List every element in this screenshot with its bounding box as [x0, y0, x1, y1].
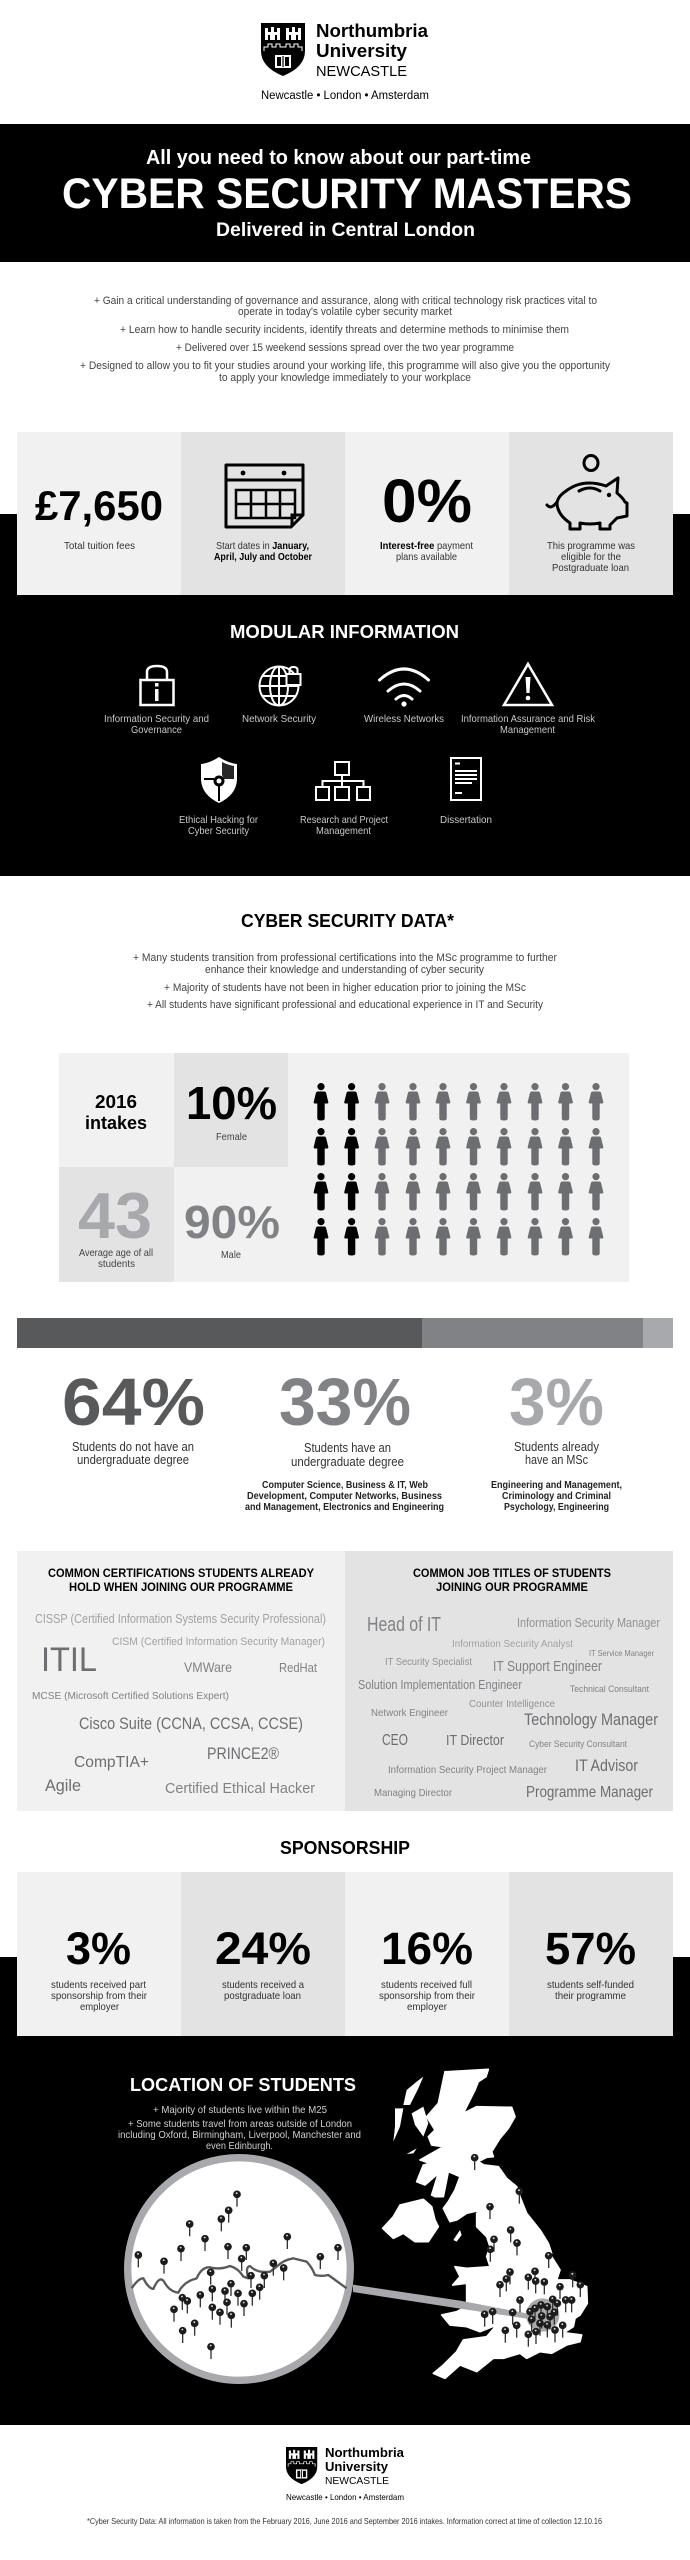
word cloud: CompTIA+ [74, 1754, 149, 1771]
word cloud: Certified Ethical Hacker [165, 1780, 315, 1797]
word cloud: Network Engineer [371, 1707, 448, 1719]
word cloud: Cyber Security Consultant [529, 1739, 627, 1750]
stat: 16 percent: 16% [381, 1923, 473, 1974]
logo wordmark [286, 2445, 405, 2502]
word cloud: IT Support Engineer [493, 1658, 602, 1675]
data bullet points [133, 952, 557, 1011]
word cloud: Technical Consultant [570, 1684, 649, 1695]
intro bullet points: + Designed to allow you to fit your studies around your working life, this programme will also give you the opportunity [80, 360, 610, 372]
stat: 24 percent [215, 1923, 311, 2002]
average age stat: students [98, 1258, 135, 1270]
stat: 3 percent [51, 1923, 147, 2013]
label: information security [104, 713, 209, 736]
loan text: Postgraduate loan [552, 562, 629, 574]
stat: 33 percent: and Management, Electronics and Engineering [245, 1501, 444, 1513]
label: network security: Network Security [242, 713, 317, 725]
intro bullet points: + Gain a critical understanding of governance and assurance, along with critical technology risk practices vital to [94, 295, 597, 307]
stat: 3 percent: 3% [66, 1923, 131, 1974]
heading: HOLD WHEN JOINING OUR PROGRAMME [69, 1580, 293, 1594]
label: research [300, 814, 388, 837]
female stat: 10% [186, 1077, 277, 1129]
loan text [547, 540, 635, 574]
data bullet points: + All students have significant professional and educational experience in IT and Security [147, 999, 543, 1011]
stat: 16 percent [379, 1923, 475, 2013]
heading: cyber security data: CYBER SECURITY DATA* [241, 911, 454, 931]
interest free: plans available [396, 551, 457, 563]
label: dissertation: Dissertation [440, 814, 492, 826]
heading: modular information: MODULAR INFORMATION [230, 621, 459, 642]
interest free: Interest-free payment [380, 540, 473, 552]
footer logo [286, 2445, 405, 2502]
word cloud: CISSP (Certified Information Systems Security Professional) [35, 1612, 326, 1626]
stat: 33 percent: Computer Science, Business & IT, Web [262, 1479, 428, 1491]
stat: 64 percent: undergraduate degree [77, 1452, 189, 1467]
header logo [261, 21, 429, 102]
word cloud: MCSE (Microsoft Certified Solutions Expert) [32, 1690, 229, 1702]
stat: 24 percent: students received a [222, 1979, 304, 1991]
logo wordmark: University [325, 2459, 389, 2474]
intro bullet points: operate in today's volatile cyber security market [238, 306, 452, 318]
intro bullet points: + Learn how to handle security incidents, identify threats and determine methods to minimise them [120, 324, 569, 336]
tuition fee [35, 482, 163, 552]
Great Britain [417, 2069, 587, 2378]
stat: 3 percent: Students already [514, 1439, 599, 1454]
panel: sponsorship [17, 1872, 673, 2036]
stat: 64 percent: 64% [62, 1365, 205, 1440]
word cloud: CISM (Certified Information Security Manager) [112, 1636, 325, 1648]
modules [104, 664, 596, 837]
stat: 57 percent: their programme [555, 1990, 626, 2002]
logo wordmark: Newcastle • London • Amsterdam [286, 2492, 404, 2502]
word cloud: Information Security Manager [517, 1616, 660, 1630]
label: research: Management [316, 825, 371, 837]
icon: warning triangle [504, 664, 552, 705]
location bullet points: even Edinburgh. [206, 2140, 273, 2152]
label: ethical hacking: Cyber Security [188, 825, 250, 837]
heading: COMMON CERTIFICATIONS STUDENTS ALREADY [48, 1566, 314, 1580]
word cloud: Cisco Suite (CCNA, CCSA, CCSE) [79, 1714, 303, 1733]
tuition fee: Total tuition fees [64, 540, 135, 552]
icon: padlock [140, 666, 174, 705]
male stat: 90% [184, 1196, 280, 1248]
location bullet points [118, 2104, 361, 2152]
icon: org chart [316, 762, 370, 800]
word cloud: IT Service Manager [589, 1648, 654, 1658]
word cloud: PRINCE2® [207, 1744, 279, 1763]
stat: 16 percent: sponsorship from their [379, 1990, 475, 2002]
stat: 3 percent: 3% [509, 1365, 604, 1440]
panel: 2016 intakes [59, 1053, 629, 1282]
title: All you need to know about our part-time [146, 147, 531, 169]
stat: 3 percent: have an MSc [525, 1452, 588, 1467]
heading [413, 1566, 611, 1594]
islands [393, 2077, 462, 2242]
icon: wifi [380, 669, 428, 707]
word cloud [358, 1614, 660, 1801]
stat: 3 percent [491, 1365, 622, 1513]
start dates: April, July and October [214, 551, 312, 563]
stat: 16 percent: students received full [381, 1979, 472, 1991]
word cloud: VMWare [184, 1659, 232, 1675]
word cloud: Information Security Project Manager [388, 1764, 547, 1776]
data bullet points: + Majority of students have not been in higher education prior to joining the MSc [164, 982, 526, 994]
stat: 33 percent: Development, Computer Networks, Business [247, 1490, 442, 1502]
logo wordmark: Newcastle • London • Amsterdam [261, 90, 429, 102]
logo wordmark: Northumbria [316, 21, 429, 41]
stat: 3 percent: Psychology, Engineering [504, 1501, 609, 1513]
panel: key facts [17, 432, 673, 595]
word cloud: CEO [382, 1732, 408, 1749]
stat: 3 percent: employer [80, 2001, 119, 2013]
intro bullet points: + Delivered over 15 weekend sessions spread over the two year programme [176, 342, 514, 354]
loan text: eligible for the [561, 551, 621, 563]
word cloud: IT Director [446, 1732, 504, 1749]
river Thames [132, 2258, 347, 2293]
stat: 33 percent: undergraduate degree [291, 1454, 404, 1469]
male stat: Male [221, 1249, 241, 1261]
2016 intakes label: intakes [85, 1113, 147, 1133]
title [62, 147, 632, 241]
stacked bar: education [17, 1318, 673, 1348]
pictogram: female and male students [314, 1083, 603, 1256]
heading: JOINING OUR PROGRAMME [436, 1580, 588, 1594]
map: United Kingdom with student pins [353, 2069, 587, 2378]
stat: 33 percent [245, 1365, 444, 1513]
location bullet points: + Some students travel from areas outside of London [128, 2118, 352, 2130]
word cloud: Agile [45, 1776, 81, 1795]
word cloud: IT Advisor [575, 1756, 638, 1775]
stat: 64 percent: Students do not have an [72, 1439, 194, 1454]
black background: location section [0, 1957, 690, 2425]
word cloud: Head of IT [367, 1614, 441, 1636]
label: ethical hacking [179, 814, 258, 837]
logo wordmark: University [316, 41, 407, 61]
word cloud: Programme Manager [526, 1784, 654, 1801]
start dates [214, 540, 312, 563]
word cloud: ITIL [41, 1641, 97, 1679]
icon: university crest [286, 2447, 317, 2484]
icon: globe with lock [260, 666, 300, 706]
icon: calendar [226, 465, 303, 527]
heading [48, 1566, 314, 1594]
label: research: Research and Project [300, 814, 388, 826]
tuition fee: £7,650 [35, 482, 163, 529]
intro bullet points [80, 295, 610, 384]
magnifier handle [353, 2285, 527, 2319]
magnifier: London map with student pins [128, 2158, 350, 2380]
logo wordmark: NEWCASTLE [325, 2475, 389, 2487]
word cloud: Solution Implementation Engineer [358, 1678, 522, 1692]
word cloud: Information Security Analyst [452, 1638, 573, 1650]
word cloud: IT Security Specialist [385, 1656, 472, 1668]
average age stat: Average age of all [79, 1247, 153, 1259]
stat: 3 percent: sponsorship from their [51, 1990, 147, 2002]
location bullet points: + Majority of students live within the M25 [153, 2104, 327, 2116]
label: information assurance: Management [500, 724, 555, 736]
stat: 57 percent [545, 1923, 636, 2002]
interest free [380, 467, 473, 563]
loan text: This programme was [547, 540, 635, 552]
logo wordmark: Northumbria [325, 2445, 405, 2460]
label: information assurance: Information Assurance and Risk [461, 713, 596, 725]
stat: 16 percent: employer [407, 2001, 447, 2013]
label: wireless networks: Wireless Networks [364, 713, 444, 725]
title: CYBER SECURITY MASTERS [62, 170, 632, 218]
stat: 57 percent: students self-funded [547, 1979, 634, 1991]
word cloud: Managing Director [374, 1787, 452, 1799]
label: information security: Governance [131, 724, 182, 736]
average age stat: 43 [78, 1179, 152, 1252]
stat: 3 percent: Criminology and Criminal [502, 1490, 611, 1502]
label: information assurance [461, 713, 596, 736]
stat: 33 percent: Students have an [304, 1440, 391, 1455]
icon: document [451, 758, 481, 800]
word cloud [32, 1612, 326, 1797]
heading: sponsorship: SPONSORSHIP [280, 1838, 410, 1858]
stat: 24 percent: postgraduate loan [224, 1990, 301, 2002]
Northern Ireland [383, 2199, 438, 2242]
title banner [0, 124, 690, 262]
icon: university crest [261, 23, 305, 76]
female stat: Female [216, 1131, 247, 1143]
icon: piggy bank [547, 456, 627, 529]
London highlight [526, 2298, 559, 2332]
panel: common job titles [345, 1551, 673, 1811]
black background: modular section [0, 514, 690, 876]
label: ethical hacking: Ethical Hacking for [179, 814, 258, 826]
icon: shield [201, 757, 237, 803]
stat: 3 percent: students received part [51, 1979, 146, 1991]
London pins [134, 2190, 342, 2359]
stat: 3 percent: Engineering and Management, [491, 1479, 622, 1491]
logo wordmark [261, 21, 429, 102]
title: Delivered in Central London [216, 220, 475, 241]
footnote: *Cyber Security Data: All information is taken from the February 2016, June 2016 and September 2016 intakes. Information correct at time of collection 12.10.16 [87, 2516, 602, 2526]
heading: location of students: LOCATION OF STUDENTS [130, 2074, 356, 2095]
logo wordmark: NEWCASTLE [316, 63, 407, 80]
UK pins [471, 2154, 584, 2347]
panel: common certifications [17, 1551, 345, 1811]
heading: COMMON JOB TITLES OF STUDENTS [413, 1566, 611, 1580]
start dates: Start dates in January, [216, 540, 309, 552]
stat: 33 percent: 33% [279, 1365, 411, 1440]
2016 intakes label: 2016 [95, 1092, 137, 1112]
intro bullet points: to apply your knowledge immediately to your workplace [219, 372, 471, 384]
stat: 64 percent [62, 1365, 205, 1467]
data bullet points: enhance their knowledge and understanding of cyber security [205, 964, 484, 976]
interest free: 0% [382, 467, 472, 535]
2016 intakes label [85, 1092, 147, 1133]
stat: 57 percent: 57% [545, 1923, 636, 1974]
data bullet points: + Many students transition from professional certifications into the MSc programme to further [133, 952, 557, 964]
label: information security: Information Security and [104, 713, 209, 725]
stat: 24 percent: 24% [215, 1923, 311, 1974]
location bullet points: including Oxford, Birmingham, Liverpool, Manchester and [118, 2129, 361, 2141]
word cloud: Counter Intelligence [469, 1698, 555, 1710]
word cloud: RedHat [279, 1660, 317, 1675]
word cloud: Technology Manager [524, 1710, 658, 1729]
